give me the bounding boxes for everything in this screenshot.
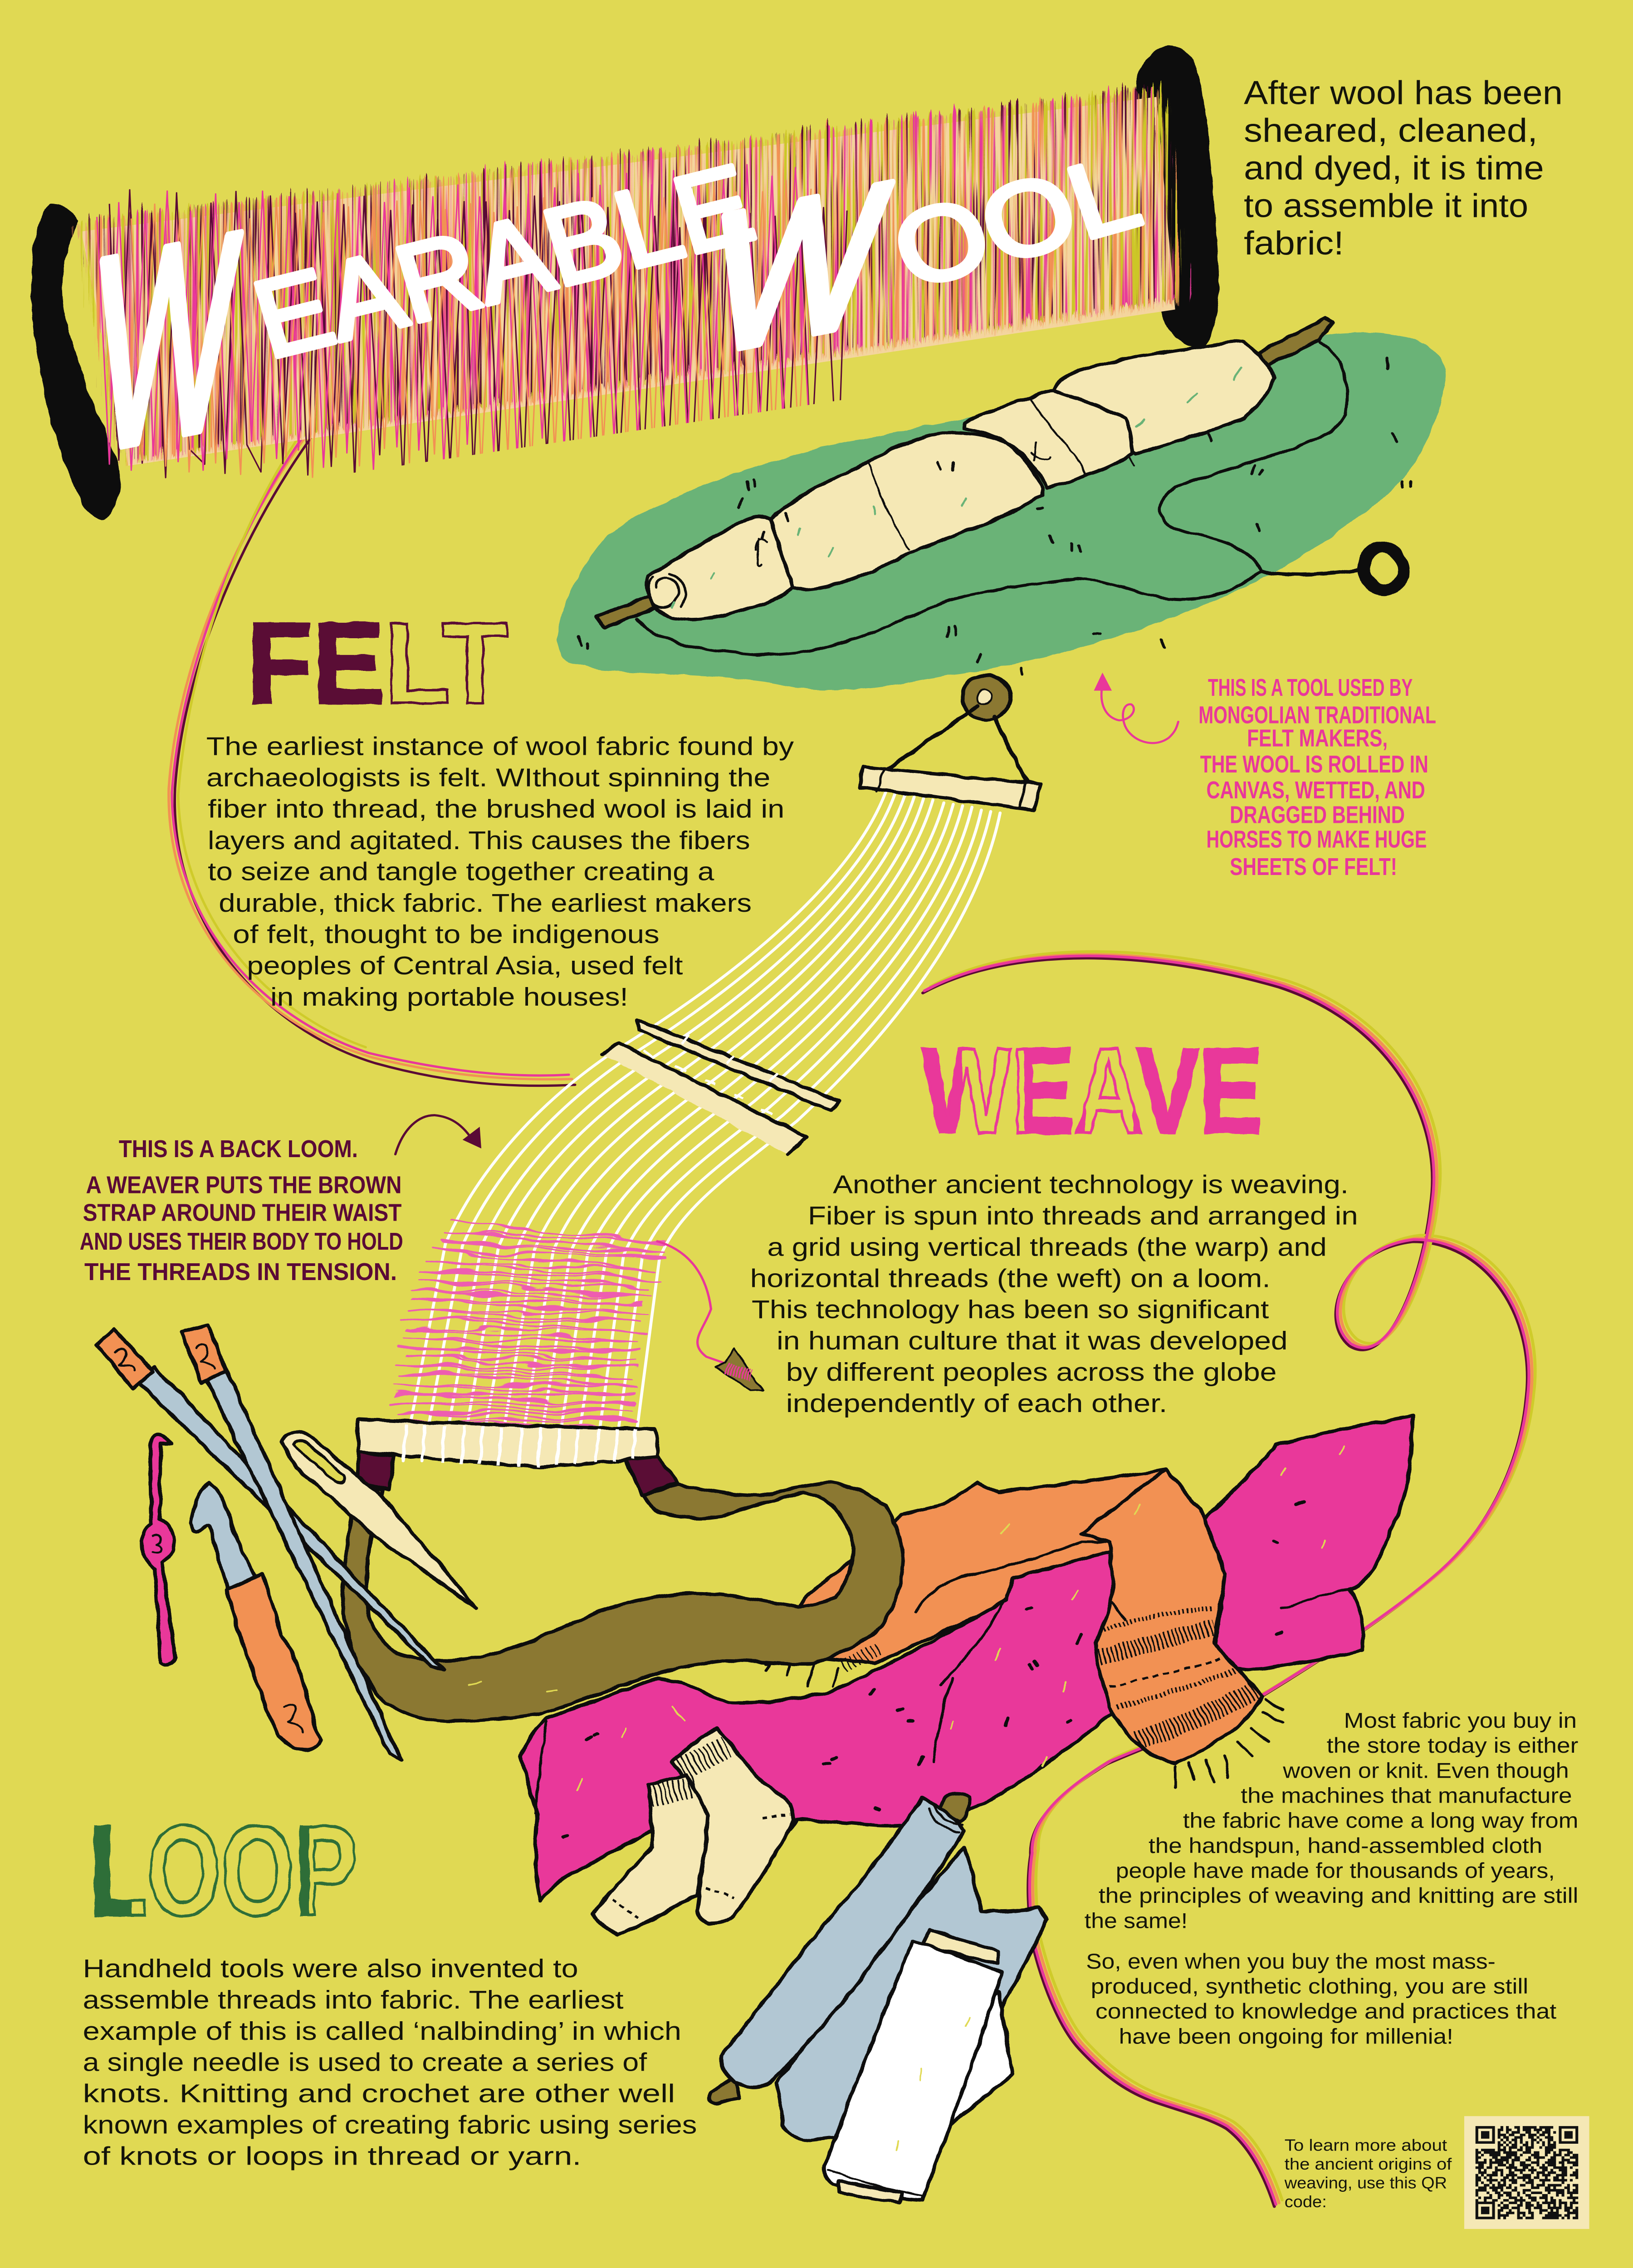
- text block: felt: durable, thick fabric. The earliest makers: [219, 889, 752, 917]
- arrowhead: [1094, 673, 1112, 691]
- hanger strings: [886, 706, 1027, 782]
- felt roll segment right: [1053, 342, 1275, 454]
- text block: modern fabric: the handspun, hand-assembled cloth: [1149, 1834, 1542, 1857]
- text block: modern fabric: Most fabric you buy in: [1344, 1709, 1577, 1733]
- title: Wearable Wool: W: [87, 173, 247, 510]
- yarn thread: weave section to bottom: [923, 952, 1535, 2206]
- heading: FELT: FELT: [247, 599, 508, 728]
- text block: modern fabric: have been ongoing for millenia!: [1119, 2025, 1453, 2048]
- blue sheet: [777, 1847, 1047, 2141]
- knitting needle 1: [137, 1367, 444, 1671]
- text block: weave: Another ancient technology is weaving.: [833, 1171, 1349, 1199]
- text: QR caption: To learn more about: [1285, 2136, 1447, 2154]
- heading: LOOP: LOOP: [89, 1799, 358, 1942]
- cuff pattern bands: [1100, 1608, 1255, 1740]
- fabric pile: [342, 1416, 1413, 2203]
- orange cuff hatching left: [844, 1649, 878, 1666]
- pink notes: CANVAS, WETTED, AND: [1207, 776, 1425, 804]
- seams and ties: [756, 398, 1134, 566]
- blue roll: [722, 1798, 964, 2087]
- cream sheet behind white roll: [922, 1930, 998, 1964]
- text block: loop: a single needle is used to create a series of: [83, 2048, 647, 2077]
- white fabric flap: [950, 1992, 1012, 2125]
- text block: modern fabric: [1085, 1709, 1578, 2048]
- olive strap: [342, 1482, 903, 1721]
- loom shuttle: [716, 1348, 763, 1392]
- threads over sticks: [644, 1036, 778, 1114]
- text block: weave: by different peoples across the globe: [786, 1358, 1277, 1386]
- pink notes: DRAGGED BEHIND: [1230, 801, 1405, 828]
- blue roll spiral: [928, 1802, 963, 1833]
- intro text: to assemble it into: [1244, 187, 1528, 225]
- text block: loop: knots. Knitting and crochet are other well: [83, 2080, 675, 2108]
- text block: modern fabric: the fabric have come a long way from: [1183, 1809, 1578, 1833]
- text: QR caption: weaving, use this QR: [1284, 2174, 1447, 2192]
- intro text: fabric!: [1244, 225, 1344, 262]
- hanger ring: [962, 675, 1010, 719]
- text block: weave: a grid using vertical threads (the warp) and: [767, 1233, 1327, 1261]
- heading: WEAVE: WEAVE: [922, 1023, 1263, 1158]
- text block: felt: archaeologists is felt. WIthout spinning the: [206, 763, 770, 792]
- wool scribble lines: [96, 164, 848, 478]
- maroon arrow: [396, 1115, 470, 1154]
- pink notes: HORSES TO MAKE HUGE: [1207, 826, 1427, 853]
- text block: modern fabric: the machines that manufacture: [1241, 1784, 1572, 1808]
- knitting needle 2: [206, 1371, 401, 1760]
- text block: weave: Fiber is spun into threads and arranged in: [808, 1202, 1358, 1230]
- text block: weave: independently of each other.: [786, 1389, 1167, 1418]
- roll spiral end: [648, 573, 686, 608]
- sock right: [672, 1729, 794, 1924]
- spool left flange: [31, 203, 121, 521]
- text block: weave: horizontal threads (the weft) on a loom.: [750, 1264, 1271, 1293]
- pink notes: THIS IS A TOOL USED BY: [1208, 674, 1413, 701]
- cloth fold lines: [536, 1600, 1005, 1814]
- text block: felt: layers and agitated. This causes the fibers: [208, 826, 750, 855]
- needle 1 head: [97, 1329, 153, 1388]
- pink crochet hook: [142, 1435, 175, 1664]
- text block: felt: in making portable houses!: [270, 983, 628, 1012]
- title: Wearable Wool: [87, 132, 1153, 510]
- loom heddle sticks: [603, 1020, 839, 1154]
- green fleck marks: [672, 367, 1241, 607]
- warp threads on bottom bar: [403, 1425, 636, 1466]
- spool of wool with title: [31, 44, 1219, 570]
- sock left: [592, 1775, 708, 1936]
- sock ribs: [681, 1747, 727, 1769]
- felt roll segment centre: [770, 432, 1042, 589]
- wooden spindle ends: [597, 589, 680, 628]
- title: Wearable Wool: EARABLE: [241, 142, 766, 381]
- pink notes: FELT MAKERS,: [1247, 724, 1388, 752]
- orange contour: [916, 1542, 1125, 1620]
- text: QR caption: the ancient origins of: [1285, 2155, 1452, 2173]
- text block: felt: to seize and tangle together creating a: [208, 858, 714, 886]
- maroon strap tabs: [358, 1452, 394, 1490]
- white roll: [825, 1941, 1002, 2200]
- needle 2 head: [181, 1325, 227, 1383]
- note text: THE THREADS IN TENSION.: [84, 1258, 397, 1286]
- note text: STRAP AROUND THEIR WAIST: [83, 1198, 401, 1226]
- knitting and crochet tools: [97, 1325, 477, 1760]
- note text: [80, 1135, 403, 1286]
- scarf fringe: [1175, 1700, 1283, 1788]
- top bar: [860, 767, 1041, 810]
- loom top hanger: [860, 675, 1041, 810]
- orange fabric back: [766, 1470, 1225, 1663]
- head numbers: [116, 1344, 215, 1371]
- green canvas: [556, 332, 1446, 690]
- spool right flange: [1136, 44, 1219, 348]
- upper heddle stick: [638, 1020, 839, 1111]
- pink cloth specks: [562, 1501, 1303, 1837]
- text: QR caption: [1284, 2136, 1452, 2211]
- text block: weave: This technology has been so significant: [752, 1295, 1269, 1324]
- black specks: [578, 357, 1411, 674]
- title: Wearable Wool: W: [697, 139, 900, 397]
- text block: loop: example of this is called ‘nalbinding’ in which: [83, 2017, 681, 2045]
- back loom warp threads: [403, 791, 1000, 1461]
- text block: loop: known examples of creating fabric using series: [83, 2111, 697, 2139]
- ring hole: [977, 690, 993, 704]
- pink notes: SHEETS OF FELT!: [1230, 853, 1397, 880]
- loom bottom bar: [358, 1419, 657, 1466]
- text block: modern fabric: produced, synthetic clothing, you are still: [1091, 1975, 1528, 1999]
- note text: A WEAVER PUTS THE BROWN: [86, 1171, 401, 1198]
- lower rod: [709, 2077, 739, 2103]
- wool strands: orange: [78, 95, 1181, 469]
- upper rod: [938, 1794, 970, 1823]
- note text: AND USES THEIR BODY TO HOLD: [80, 1227, 403, 1255]
- wool strands: pink: [78, 95, 1181, 469]
- text block: modern fabric: the store today is either: [1327, 1734, 1578, 1758]
- text block: loop: [83, 1955, 697, 2170]
- yarn thread: spool to felt section: [169, 420, 575, 1086]
- pink cloth front: [520, 1552, 1114, 1901]
- text block: weave: in human culture that it was developed: [777, 1327, 1288, 1355]
- text block: felt: [206, 733, 794, 1012]
- callout: felt tool: [1094, 673, 1436, 880]
- cream darning needle: [281, 1432, 477, 1608]
- lower heddle bar: [603, 1043, 807, 1154]
- orange scarf front: [1081, 1470, 1263, 1763]
- pink notes: [1198, 674, 1436, 880]
- text block: modern fabric: woven or knit. Even though: [1282, 1759, 1569, 1783]
- text block: felt: of felt, thought to be indigenous: [233, 920, 660, 949]
- wool strands: olive: [78, 95, 1181, 469]
- note text: THIS IS A BACK LOOM.: [119, 1135, 358, 1163]
- felt roll segment left: [647, 516, 792, 620]
- text block: modern fabric: connected to knowledge and practices that: [1095, 2000, 1557, 2024]
- text block: loop: assemble threads into fabric. The earliest: [83, 1986, 624, 2014]
- pink arrow: [1101, 690, 1178, 743]
- pink cloth fold: [1281, 1589, 1350, 1608]
- text block: modern fabric: people have made for thousands of years,: [1116, 1859, 1555, 1883]
- pink notes: THE WOOL IS ROLLED IN: [1200, 750, 1428, 777]
- yellow flecks on fabric: [469, 1447, 1344, 2150]
- text: QR caption: code:: [1285, 2192, 1327, 2211]
- text block: felt: fiber into thread, the brushed wool is laid in: [208, 795, 784, 823]
- felt roll segment tied: [964, 391, 1132, 488]
- intro text: and dyed, it is time: [1244, 150, 1544, 187]
- text block: loop: of knots or loops in thread or yarn.: [83, 2142, 582, 2170]
- text block: felt: peoples of Central Asia, used felt: [247, 952, 683, 980]
- text block: modern fabric: So, even when you buy the most mass-: [1086, 1950, 1496, 1973]
- pink weft weaving: [391, 1222, 731, 1429]
- pink cloth back: [1203, 1416, 1413, 1670]
- wool strands: maroon: [78, 95, 1181, 469]
- rope: [638, 343, 1347, 655]
- intro text: sheared, cleaned,: [1244, 112, 1538, 149]
- arrowhead: [463, 1127, 481, 1149]
- cord and ring: [1261, 568, 1366, 574]
- text block: modern fabric: the same!: [1085, 1909, 1188, 1933]
- blue crochet hook: [191, 1482, 256, 1591]
- wool body base: [81, 97, 1175, 466]
- pink notes: MONGOLIAN TRADITIONAL: [1198, 701, 1436, 728]
- orange handle: [227, 1574, 320, 1750]
- text block: weave: [750, 1171, 1358, 1418]
- left fringe: [766, 1659, 839, 1686]
- title: Wearable Wool: OOL: [880, 132, 1153, 311]
- note: back loom: [80, 1115, 481, 1286]
- text block: loop: Handheld tools were also invented to: [83, 1955, 578, 1983]
- text block: modern fabric: the principles of weaving and knitting are still: [1099, 1884, 1578, 1908]
- QR code: [1464, 2116, 1589, 2229]
- illustration: Mongolian felt roll: [556, 318, 1446, 690]
- intro text: After wool has been: [1244, 74, 1563, 112]
- roll end cream: [839, 2181, 902, 2203]
- text block: felt: The earliest instance of wool fabric found by: [206, 733, 794, 761]
- intro text: [1244, 74, 1563, 262]
- needle eye: [294, 1441, 345, 1483]
